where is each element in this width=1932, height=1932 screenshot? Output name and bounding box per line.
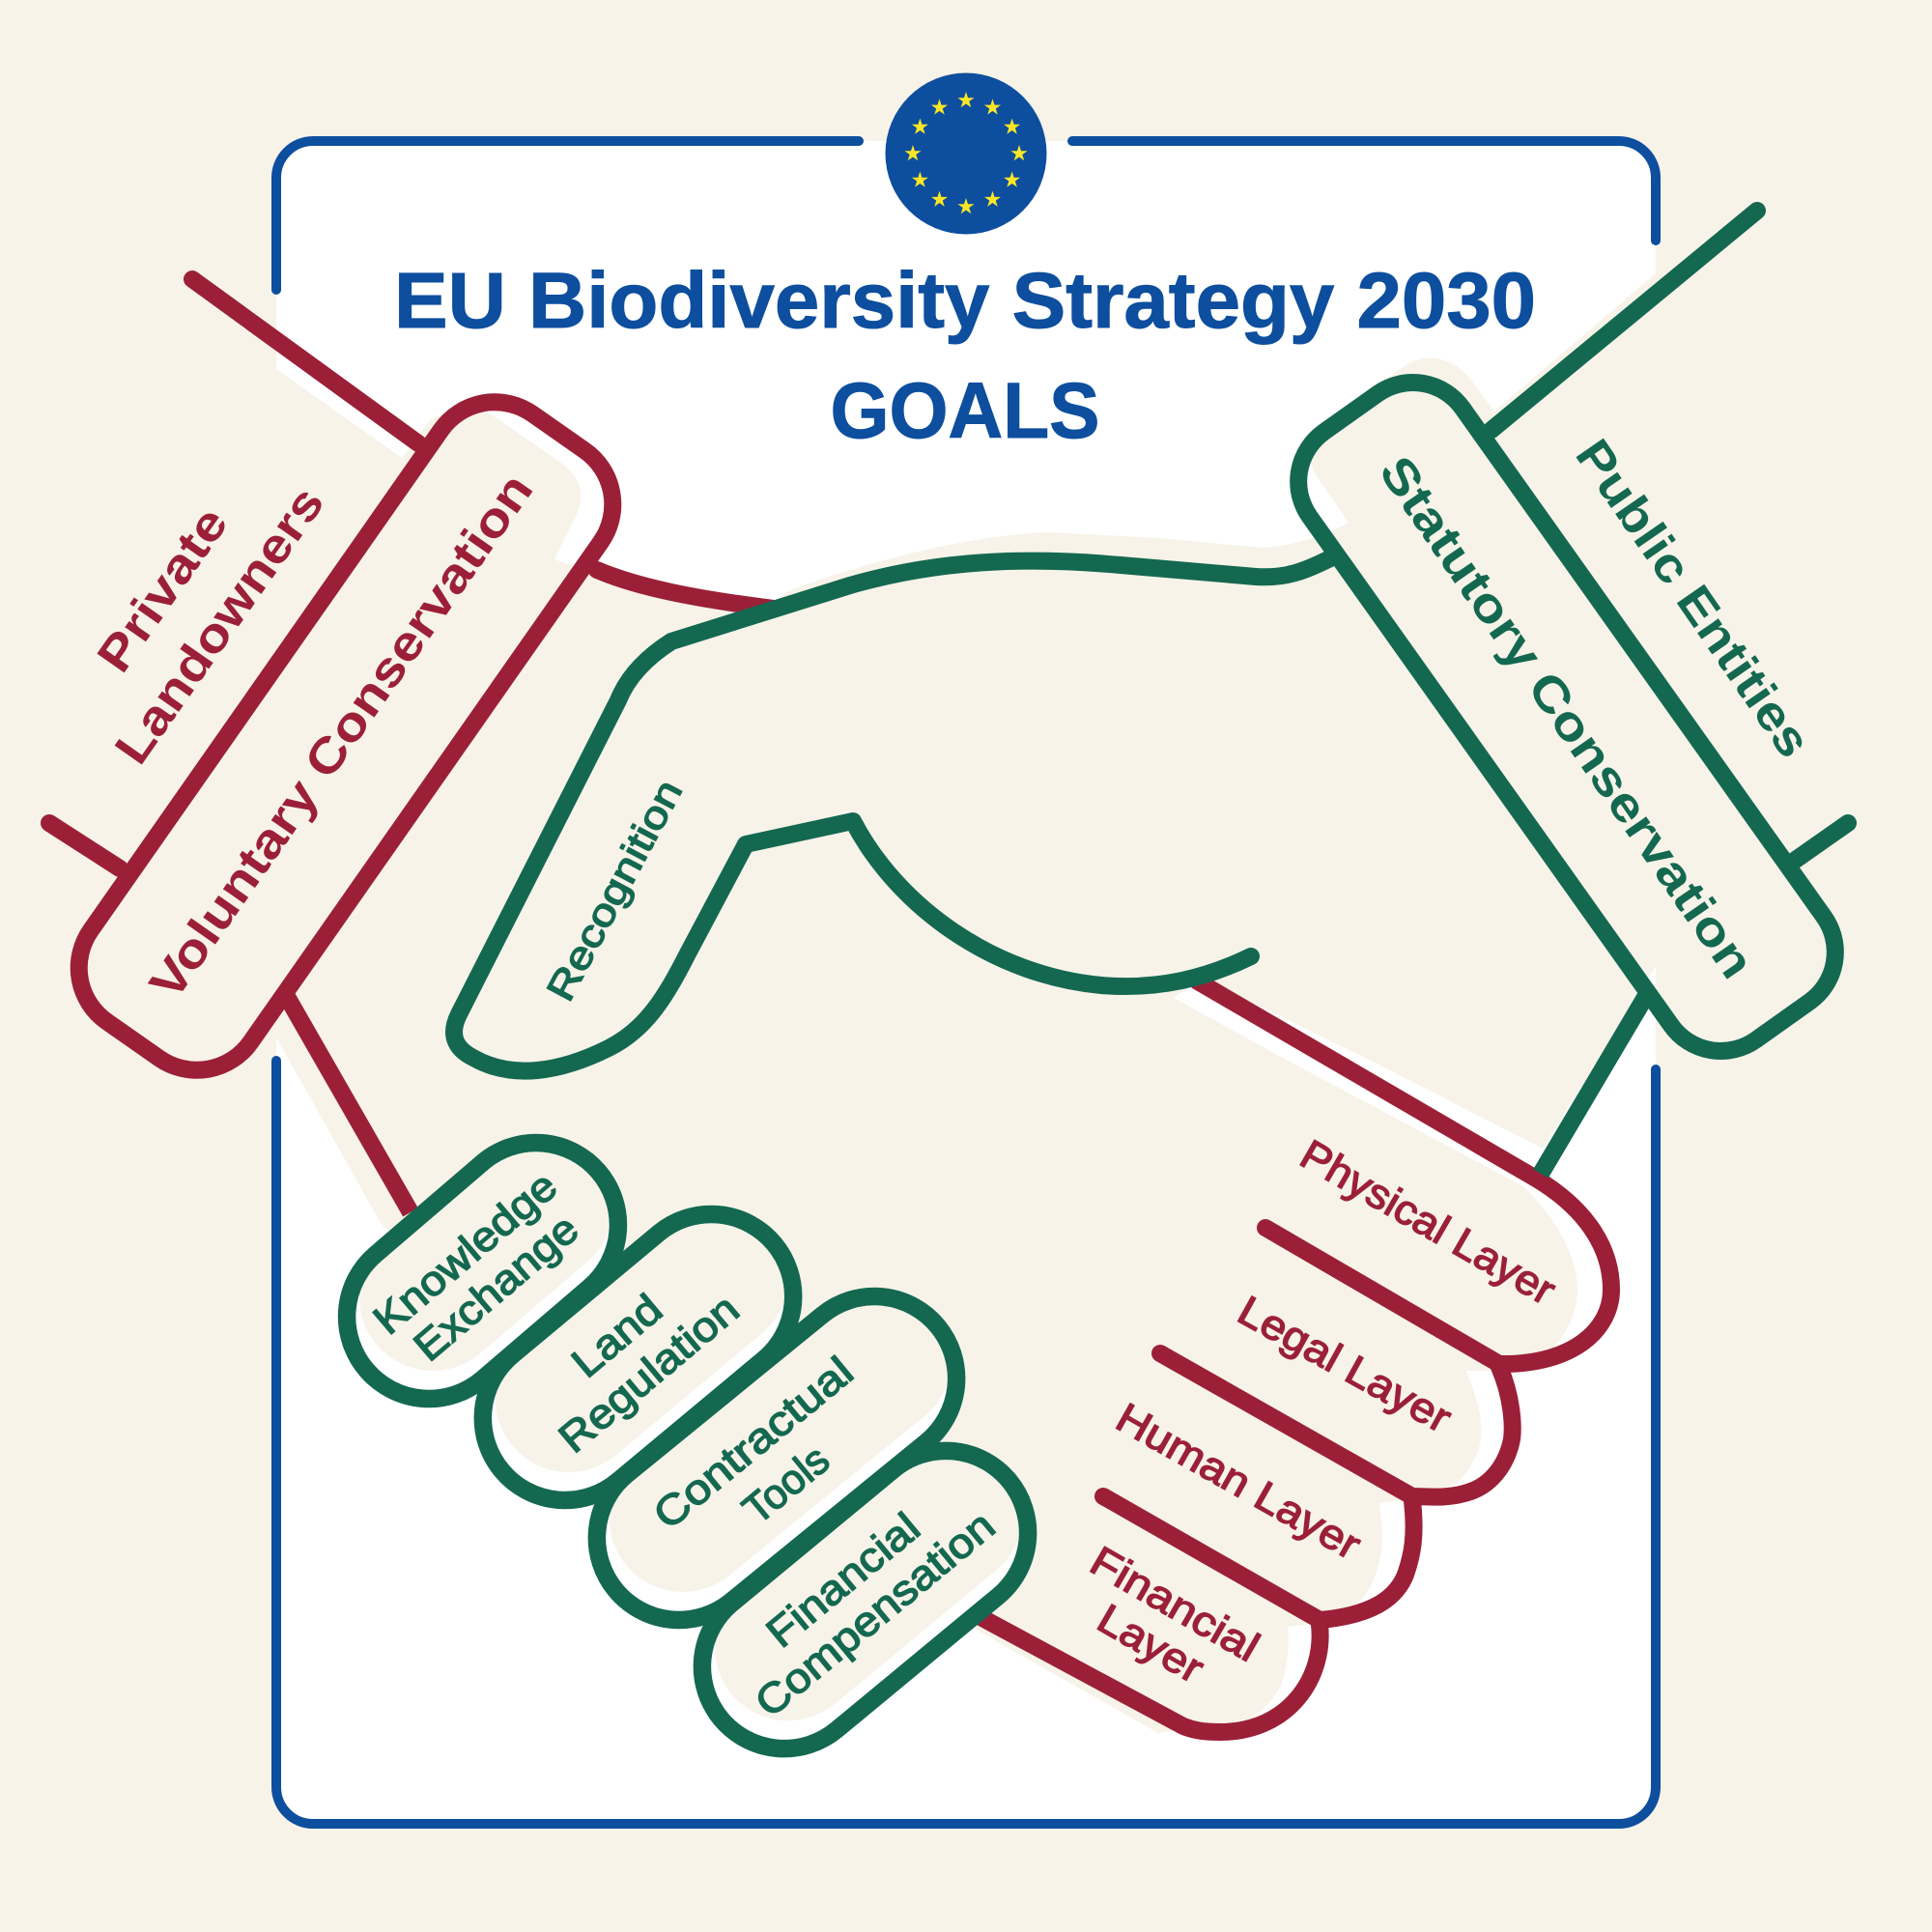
label: Financial Layer: Layer [1090, 1596, 1211, 1692]
cream hand background shape [276, 273, 1656, 1733]
icon: EU flag circle [885, 73, 1047, 234]
label: Legal Layer: Legal Layer [1230, 1288, 1459, 1442]
green sleeve: Statutory Conservation [1274, 358, 1860, 1075]
label: Contractual Tools: Tools [734, 1436, 838, 1534]
label: Knowledge Exchange: Exchange [406, 1206, 587, 1371]
label: Human Layer: Human Layer [1108, 1394, 1368, 1569]
white panel [276, 141, 1656, 1824]
label: Private Landowners: Landowners [104, 477, 334, 774]
label: Statutory Conservation: Statutory Conservation [1369, 446, 1765, 988]
label: Financial Compensation: Financial [758, 1504, 929, 1657]
label: Public Entities: Public Entities [1565, 430, 1822, 767]
finger pill fills [313, 1102, 1062, 1782]
label: Land Regulation: Regulation [551, 1286, 748, 1463]
label: Physical Layer: Physical Layer [1293, 1131, 1563, 1315]
title: GOALS [831, 367, 1099, 455]
maroon sleeve: Voluntary Conservation [53, 377, 639, 1095]
green hand: arm and thumb outlines [454, 211, 1848, 1174]
finger pill outlines [313, 1109, 1062, 1782]
label: Financial Compensation: Compensation [747, 1502, 1004, 1726]
label: Contractual Tools: Contractual [645, 1349, 863, 1539]
label: Financial Layer: Financial [1082, 1538, 1267, 1671]
label: Voluntary Conservation: Voluntary Conservation [139, 464, 543, 1009]
maroon hand: arm and finger outlines [49, 279, 1611, 1732]
title: EU Biodiversity Strategy 2030 [394, 257, 1536, 345]
title [394, 257, 1536, 455]
label: Recognition: Recognition [539, 773, 691, 1008]
label: Knowledge Exchange: Knowledge [365, 1163, 566, 1344]
label: Private Landowners: Private [87, 497, 239, 682]
blue panel frame [276, 141, 1656, 1824]
label: Knowledge Exchange [365, 1163, 587, 1371]
label: Land Regulation: Land [563, 1286, 671, 1387]
